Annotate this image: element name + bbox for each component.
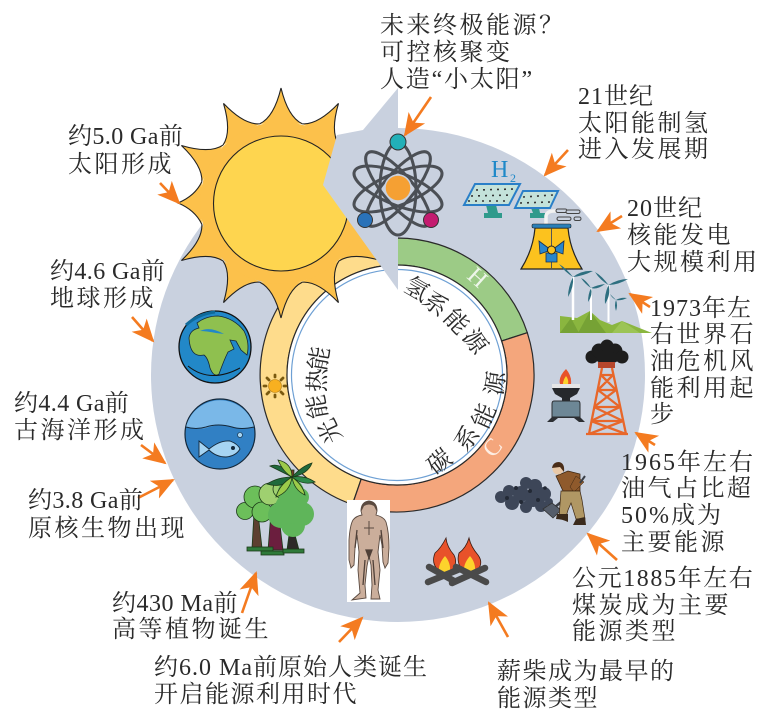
text: 1965 oil and gas: 主要能源 xyxy=(621,529,727,556)
icon: atom xyxy=(348,134,448,235)
text: 1965 oil and gas: 50%成为 xyxy=(621,502,723,529)
icon: trees xyxy=(236,460,315,555)
energy ring xyxy=(260,238,534,512)
icon: hydrogen solar panels: 2 xyxy=(510,171,516,185)
icon: small sun on ring xyxy=(264,375,286,397)
ring label: hydrogen energy: 氢 xyxy=(399,266,437,308)
ring segment: carbon energy xyxy=(352,333,534,512)
ring label: light and heat energy: 热 xyxy=(297,366,333,393)
icon: early human xyxy=(347,500,390,602)
text: ancient ocean: 约4.4 Ga前 xyxy=(14,390,129,417)
text: 1965 oil and gas: 1965年左右 xyxy=(621,449,755,476)
text: 1973 wind: 1973年左 xyxy=(650,295,752,322)
text: firewood: 能源类型 xyxy=(497,685,599,712)
ring letter C: C xyxy=(478,434,508,462)
icon: earth xyxy=(179,311,251,383)
text: future fusion: 可控核聚变 xyxy=(380,39,512,66)
text: earth formation: 地球形成 xyxy=(50,285,156,312)
text: higher plants: 高等植物诞生 xyxy=(112,616,271,643)
text: 1965 oil and gas: 油气占比超 xyxy=(621,475,754,502)
text: 1973 wind: 能利用起 xyxy=(650,375,756,402)
text: firewood: 薪柴成为最早的 xyxy=(497,658,676,685)
icon: sun xyxy=(171,88,396,318)
text: 20th century nuclear: 20世纪 xyxy=(627,195,703,222)
ring label: hydrogen energy: 能 xyxy=(437,299,479,341)
ring label: carbon energy xyxy=(418,368,512,481)
ring label: carbon energy: 碳 xyxy=(418,439,458,481)
ring label: hydrogen energy: 系 xyxy=(417,281,457,323)
arrows xyxy=(132,97,655,642)
text: 21st century solar hydrogen: 21世纪 xyxy=(578,83,654,110)
panel: grey timeline disc xyxy=(151,128,645,622)
grey wedge pointing to fusion xyxy=(323,88,398,290)
ring segment: hydrogen energy xyxy=(397,238,527,341)
icon: hydrogen solar panels xyxy=(464,157,558,218)
ring segment: light and heat energy xyxy=(260,238,397,504)
ring label: hydrogen energy xyxy=(399,266,499,361)
ring label: hydrogen energy: 源 xyxy=(456,320,499,361)
ring label: carbon energy: 系 xyxy=(444,417,486,457)
text: 20th century nuclear: 大规模利用 xyxy=(627,249,760,276)
icon: hydrogen solar panels: H xyxy=(491,157,508,183)
text: 1885 coal: 煤炭成为主要 xyxy=(572,592,731,619)
text: prokaryotes: 原核生物出现 xyxy=(28,515,187,542)
text: 1973 wind: 步 xyxy=(650,401,676,428)
text: 1973 wind: 右世界石 xyxy=(650,321,756,348)
text: 21st century solar hydrogen: 太阳能制氢 xyxy=(578,110,710,137)
text: early humans: 开启能源利用时代 xyxy=(154,681,358,708)
icon: wind turbines xyxy=(559,264,652,333)
text: future fusion: 人造“小太阳” xyxy=(380,66,534,93)
ring label: carbon energy: 源 xyxy=(474,368,512,397)
icon: gas stove xyxy=(547,369,585,422)
icon: ocean with fish xyxy=(185,399,255,469)
text: 1885 coal: 公元1885年左右 xyxy=(572,565,754,592)
text: early humans: 约6.0 Ma前原始人类诞生 xyxy=(154,654,428,681)
text: sun formation: 太阳形成 xyxy=(68,151,174,178)
icon: campfire xyxy=(428,538,486,583)
ring label: light and heat energy: 光 xyxy=(307,414,349,450)
text: earth formation: 约4.6 Ga前 xyxy=(50,258,165,285)
text: 20th century nuclear: 核能发电 xyxy=(627,222,733,249)
text: 1973 wind: 油危机风 xyxy=(650,348,756,375)
text: prokaryotes: 约3.8 Ga前 xyxy=(28,487,143,514)
ring label: light and heat energy: 能 xyxy=(298,343,336,373)
ring label: carbon energy: 能 xyxy=(461,397,503,433)
ring letter H: H xyxy=(462,263,492,293)
icon: coal pile and miner xyxy=(495,462,586,525)
text: higher plants: 约430 Ma前 xyxy=(112,590,238,617)
text: sun formation: 约5.0 Ga前 xyxy=(68,123,183,150)
ring label: light and heat energy xyxy=(296,343,349,450)
text: ancient ocean: 古海洋形成 xyxy=(14,417,146,444)
text: 1885 coal: 能源类型 xyxy=(572,618,678,645)
icon: nuclear cooling tower xyxy=(521,209,582,269)
icon: oil derrick xyxy=(586,340,628,434)
text: 21st century solar hydrogen: 进入发展期 xyxy=(578,136,710,163)
ring label: light and heat energy: 能 xyxy=(296,392,334,422)
text: future fusion: 未来终极能源？ xyxy=(380,5,566,40)
